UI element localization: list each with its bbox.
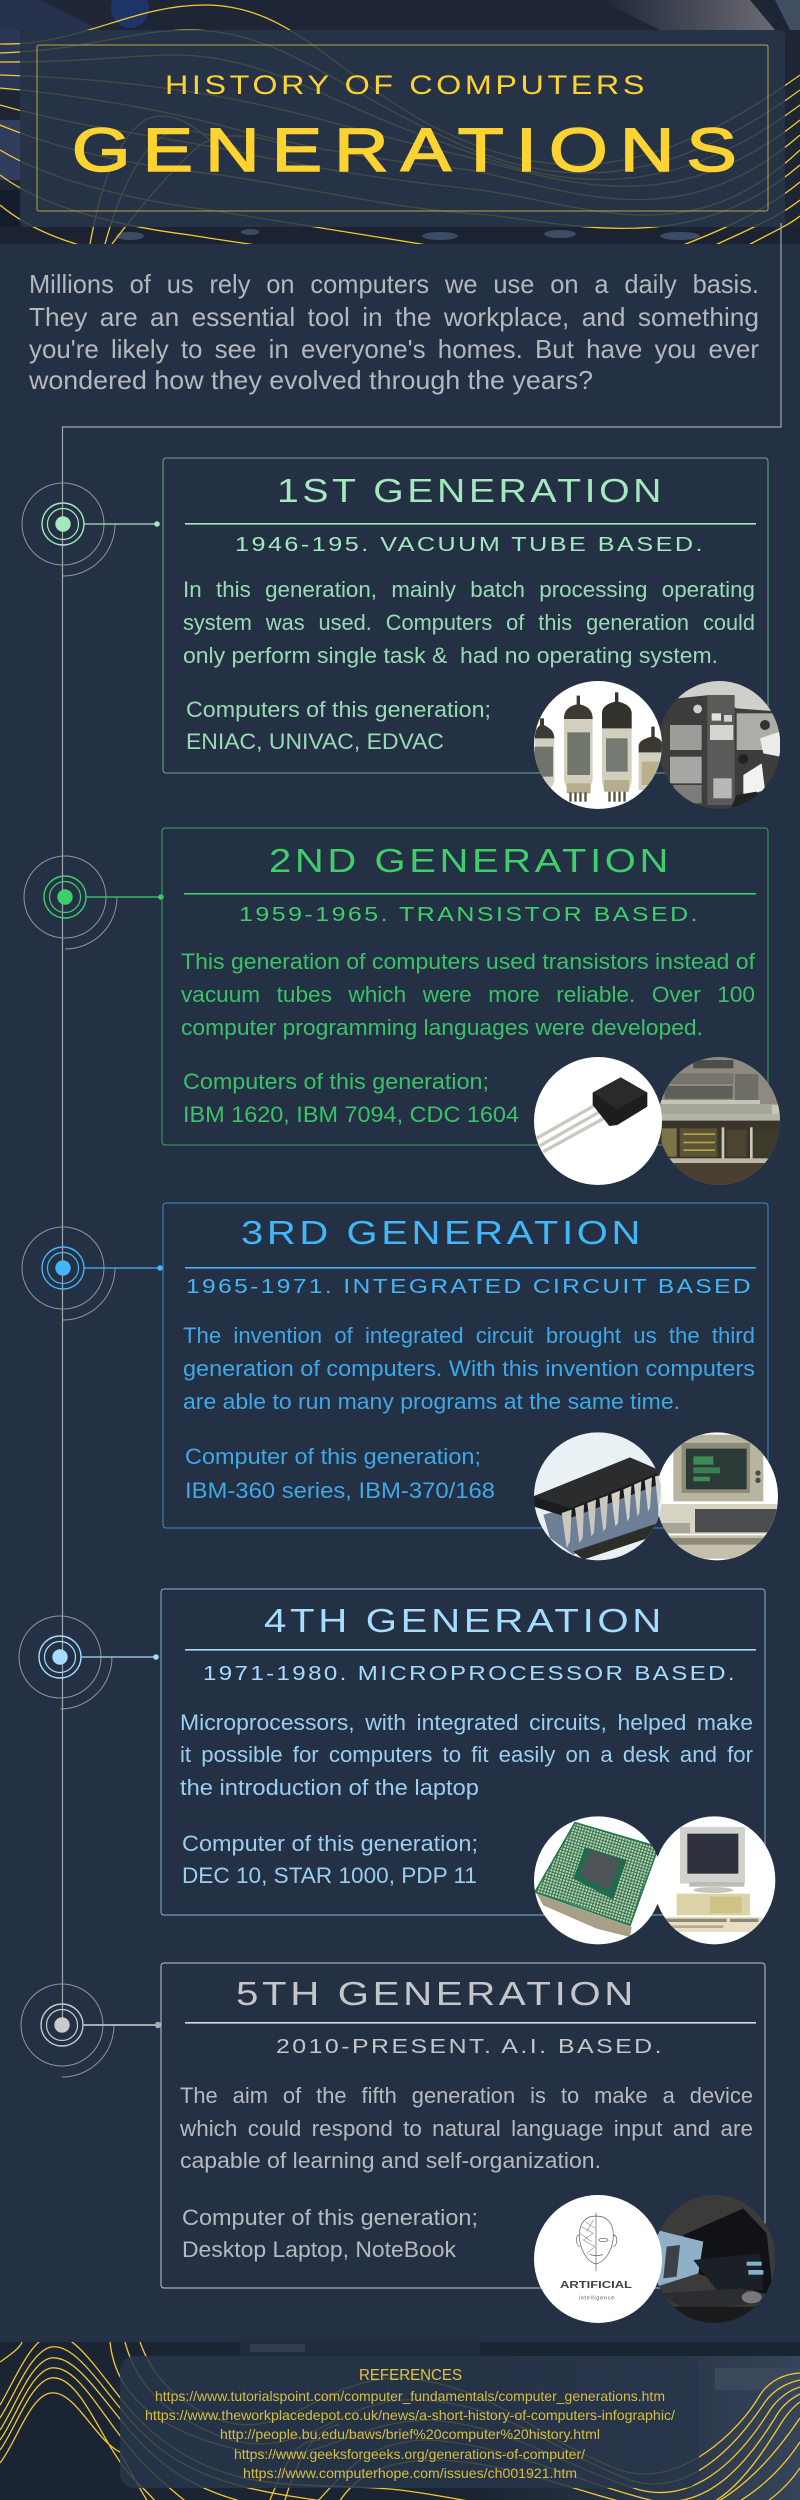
photos: AI logo and gaming laptop: [533, 2193, 777, 2327]
computers list: DEC 10, STAR 1000, PDP 11: [182, 1863, 477, 1888]
header wave lines: [0, 5, 800, 262]
computers list: [182, 1831, 478, 1888]
node: 3rd generation: [22, 1227, 163, 1320]
photos: vacuum tubes and early computer: [533, 680, 782, 810]
body text: The aim of the fifth generation is to make a device: [180, 2083, 753, 2108]
heading: 2ND GENERATION: [269, 842, 672, 879]
intro text block: Millions of us rely on computers we use on a daily basis.: [29, 269, 759, 299]
panel: 3rd generation: [163, 1203, 768, 1528]
reference links: http://people.bu.edu/baws/brief%20computer%20history.html: [220, 2426, 600, 2442]
title: generations: GENERATIONS: [72, 116, 749, 184]
heading: 5TH GENERATION: [236, 1975, 637, 2012]
intro text block: They are an essential tool in the workplace, and something: [29, 302, 759, 332]
heading: 1ST GENERATION: [277, 472, 665, 509]
body text: The invention of integrated circuit brought us the third: [183, 1323, 755, 1348]
body text: capable of learning and self-organization.: [180, 2148, 601, 2173]
computers list: ENIAC, UNIVAC, EDVAC: [186, 729, 444, 754]
header banner: [0, 0, 800, 262]
heading: 3RD GENERATION: [241, 1214, 644, 1251]
panel: 5th generation: [161, 1963, 765, 2288]
reference links: https://www.geeksforgeeks.org/generations-of-computer/: [234, 2446, 585, 2462]
node: 4th generation: [19, 1616, 159, 1709]
body text: which could respond to natural language input and are: [179, 2116, 753, 2141]
panel: 2nd generation: [162, 828, 768, 1145]
reference links: https://www.theworkplacedepot.co.uk/news/a-short-history-of-computers-infographic/: [145, 2407, 675, 2423]
computers list: [183, 1069, 519, 1127]
photos: AI logo and gaming laptop: intelligence: [579, 2296, 614, 2302]
body text: [181, 949, 756, 1040]
title: history of computers: HISTORY OF COMPUTERS: [165, 70, 648, 100]
computers list: IBM-360 series, IBM-370/168: [185, 1478, 495, 1503]
timeline connector: [62, 223, 781, 2025]
logo text: ARTIFICIAL: [560, 2280, 632, 2291]
body text: This generation of computers used transistors instead of: [181, 949, 756, 974]
body text: computer programming languages were developed.: [181, 1015, 703, 1040]
references heading: REFERENCES: [359, 2367, 462, 2384]
body text: [180, 1710, 753, 1800]
body text: [183, 1323, 755, 1414]
intro text block: wondered how they evolved through the years?: [28, 365, 593, 395]
body text: only perform single task & had no operating system.: [183, 643, 718, 668]
node: 5th generation: [21, 1984, 161, 2077]
icon: half-circuit face: [576, 2213, 617, 2271]
panel: 1st generation: [163, 458, 768, 773]
computers list: Computers of this generation;: [186, 697, 491, 722]
computers list: Computer of this generation;: [185, 1444, 481, 1469]
panel: 4th generation: [161, 1589, 765, 1915]
references panel: [120, 2356, 699, 2488]
computers list: Computers of this generation;: [183, 1069, 489, 1094]
subheading: 1965-1971. INTEGRATED CIRCUIT BASED: [186, 1276, 753, 1298]
computers list: [186, 697, 491, 754]
body text: [179, 2083, 753, 2173]
footer wave lines: [0, 2335, 800, 2500]
computers list: Computer of this generation;: [182, 1831, 478, 1856]
footer banner: [0, 2335, 800, 2500]
computers list: [185, 1444, 495, 1503]
node: 1st generation: [22, 483, 160, 576]
body text: Microprocessors, with integrated circuits, helped make: [180, 1710, 753, 1735]
subheading: 1946-195. VACUUM TUBE BASED.: [235, 534, 705, 556]
computers list: [182, 2205, 478, 2262]
body text: [183, 577, 755, 668]
heading: 4TH GENERATION: [264, 1602, 665, 1639]
body text: are able to run many programs at the same time.: [183, 1389, 680, 1414]
subheading: 1971-1980. MICROPROCESSOR BASED.: [203, 1663, 737, 1685]
reference links: https://www.tutorialspoint.com/computer_fundamentals/computer_generations.htm: [155, 2388, 665, 2404]
photos: integrated circuit and IBM terminal: [533, 1431, 780, 1563]
computers list: Desktop Laptop, NoteBook: [182, 2237, 457, 2262]
body text: the introduction of the laptop: [180, 1775, 479, 1800]
body text: it possible for computers to fit easily on a desk and for: [180, 1742, 753, 1767]
subheading: 2010-PRESENT. A.I. BASED.: [276, 2036, 664, 2058]
header translucent panel: [20, 30, 785, 227]
body text: system was used. Computers of this generation could: [183, 610, 755, 635]
body text: In this generation, mainly batch processing operating: [183, 577, 755, 602]
subheading: 1959-1965. TRANSISTOR BASED.: [239, 904, 700, 926]
body text: generation of computers. With this invention computers: [183, 1356, 755, 1381]
reference links: [145, 2388, 675, 2481]
computers list: IBM 1620, IBM 7094, CDC 1604: [183, 1102, 519, 1127]
header frame and title: [37, 45, 768, 211]
node: 2nd generation: [24, 856, 164, 949]
photos: microprocessor and desktop PC: [533, 1815, 777, 1947]
reference links: https://www.computerhope.com/issues/ch001921.htm: [243, 2465, 577, 2481]
intro text block: [28, 269, 759, 395]
photos: transistor and computer console: [533, 1055, 782, 1188]
intro text block: you're likely to see in everyone's homes. But have you ever: [29, 334, 759, 364]
body text: vacuum tubes which were more reliable. Over 100: [181, 982, 755, 1007]
computers list: Computer of this generation;: [182, 2205, 478, 2230]
